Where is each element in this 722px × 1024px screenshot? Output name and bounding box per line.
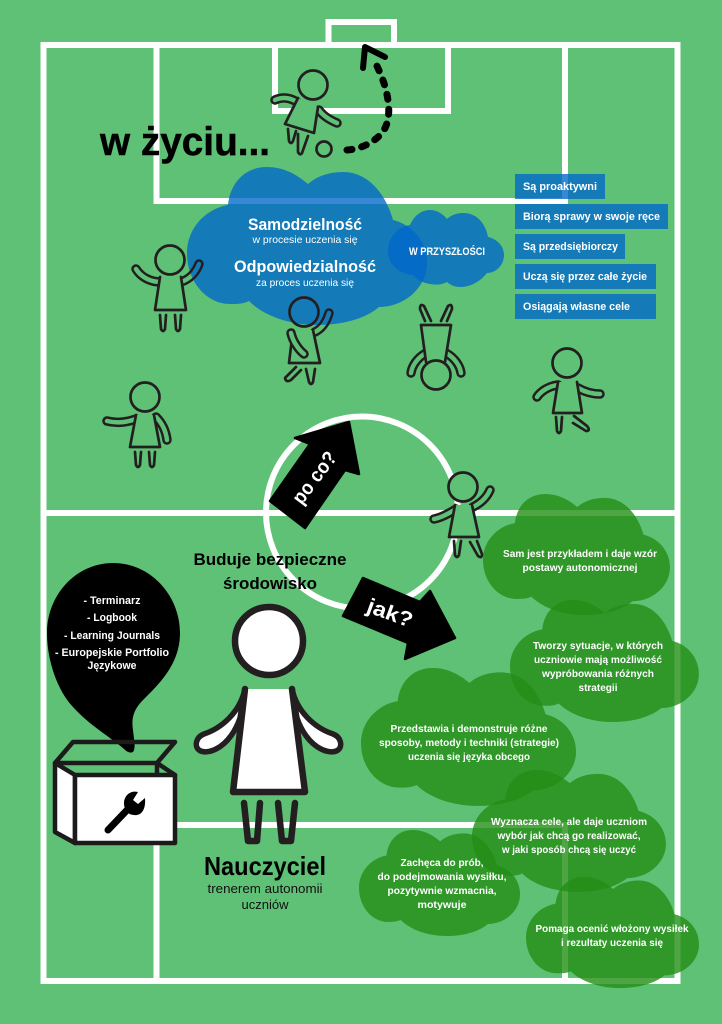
figure: left player [107,382,167,467]
figure: upside down [411,305,461,390]
green cloud texts: Sam jest przykładem i daje wzór [503,548,657,560]
heading: nauczyciel [204,851,326,912]
green cloud 6 [526,877,699,988]
cloud: W przyszłości [388,210,504,287]
cloud text: samodzielność: W PRZYSZŁOŚCI [409,245,485,258]
figure: player kicking ball [275,70,337,156]
title: w życiu: w życiu... [99,120,270,164]
green cloud texts: postawy autonomicznej [522,562,638,574]
green cloud 4 [472,770,666,892]
speech bubble: tools: - Logbook [87,612,138,624]
speech bubble: tools [47,563,180,753]
green cloud texts: do podejmowania wysiłku, [378,871,507,883]
list of future outcomes: Osiągają własne cele [523,301,630,313]
speech bubble: tools: - Europejskie Portfolio [55,647,169,659]
green cloud texts: wypróbowania różnych [541,668,654,680]
green cloud texts: Pomaga ocenić włożony wysiłek [536,923,689,935]
heading: buduje bezpieczne środowisko [194,550,346,593]
green cloud texts: motywuje [418,899,467,911]
green cloud texts: wybór jak chcą go realizować, [497,830,641,842]
green cloud 5 [359,830,520,936]
green cloud texts: uczenia się języka obcego [408,751,530,763]
heading: buduje bezpieczne środowisko: Buduje bezpieczne [194,550,346,569]
heading: buduje bezpieczne środowisko: środowisko [223,574,317,593]
figure: teacher [196,607,341,841]
icon: toolbox [55,742,175,843]
green cloud 3 [361,668,576,806]
arrow: jak?: jak? [363,594,416,632]
heading: nauczyciel: trenerem autonomii [208,881,323,896]
heading: nauczyciel: uczniów [242,897,289,912]
green cloud texts: w jaki sposób chcą się uczyć [501,844,636,856]
green cloud 1 [483,494,670,615]
arrow: po co? [270,422,359,528]
dashed arrow to goal [347,47,389,150]
list of future outcomes: Są przedsiębiorczy [523,241,619,253]
arrow: po co?: po co? [288,447,342,509]
green cloud texts: Wyznacza cele, ale daje uczniom [491,816,647,828]
speech bubble: tools: - Learning Journals [64,630,160,642]
green cloud texts: Zachęca do prób, [400,857,484,869]
green cloud texts: Przedstawia i demonstruje różne [390,723,548,735]
green cloud texts: sposoby, metody i techniki (strategie) [379,737,559,749]
list of future outcomes [515,174,668,319]
cloud text: samodzielność: za proces uczenia się [256,277,354,289]
figure: player on centre circle [434,472,490,557]
green cloud 2 [510,600,699,722]
cloud text: samodzielność: w procesie uczenia się [252,234,358,246]
list of future outcomes: Biorą sprawy w swoje ręce [523,211,660,223]
arrow: jak? [343,578,455,659]
speech bubble: tools: - Terminarz [84,595,141,607]
cloud text: samodzielność: Samodzielność [248,215,362,234]
green cloud texts: uczniowie mają możliwość [534,654,662,666]
figure: under cloud [285,298,329,384]
green cloud texts: pozytywnie wzmacnia, [388,885,497,897]
green cloud texts: i rezultaty uczenia się [561,937,663,949]
cloud text: samodzielność [234,215,485,289]
cloud text: samodzielność: Odpowiedzialność [234,257,376,276]
heading: nauczyciel: Nauczyciel [204,851,326,881]
green cloud texts: strategii [578,682,618,694]
green cloud texts: Tworzy sytuacje, w których [533,640,663,652]
list of future outcomes: Uczą się przez całe życie [523,271,647,283]
list of future outcomes: Są proaktywni [523,181,597,193]
cloud: samodzielność i odpowiedzialność [187,167,427,325]
figure: arms raised [136,246,199,331]
green cloud texts [378,548,689,949]
figure: right player [537,348,600,433]
speech bubble: tools: Językowe [88,660,136,672]
